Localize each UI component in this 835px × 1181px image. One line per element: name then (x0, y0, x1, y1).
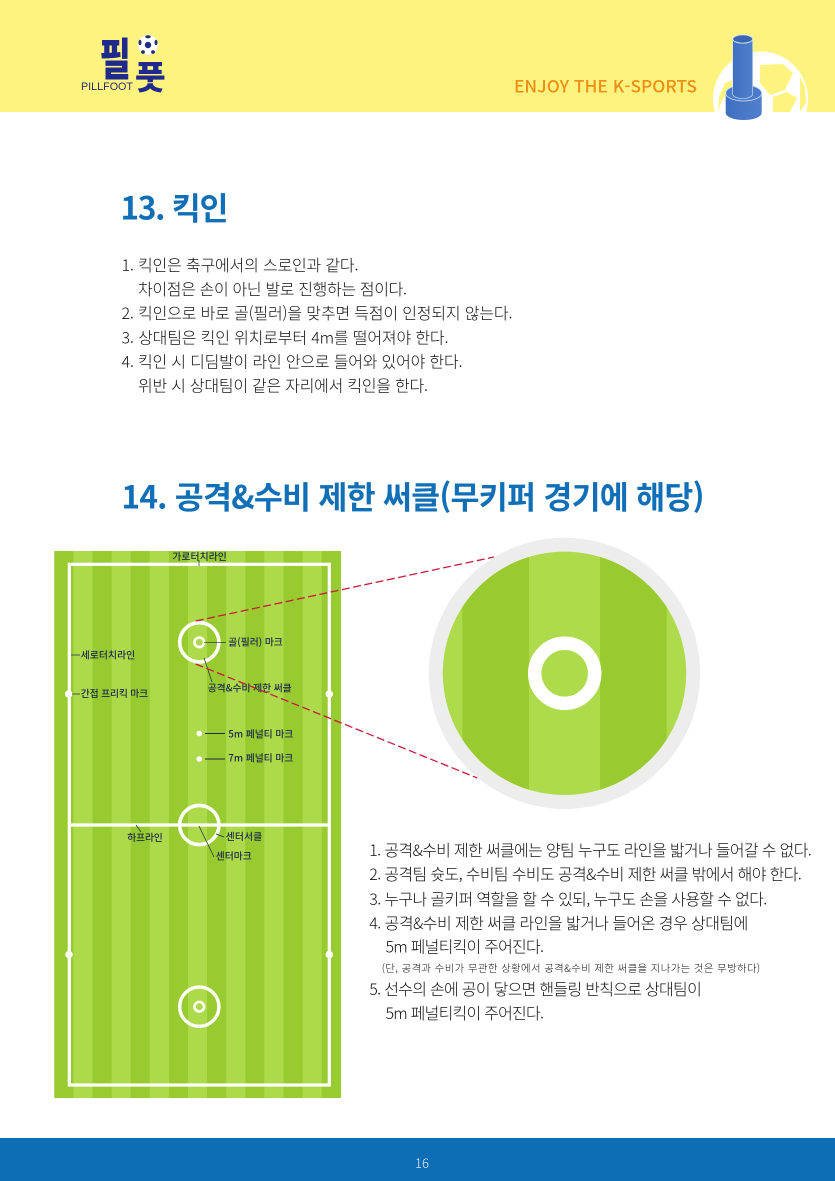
text block: section 13 rules: 2. 킥인으로 바로 골(필러)을 맞추면 득점이 인정되지 않는다. (122, 300, 512, 324)
text block: section 13 rules: 차이점은 손이 아닌 발로 진행하는 점이다. (138, 276, 407, 300)
text block: section 14 rules: (단, 공격과 수비가 무관한 상황에서 공격&수비 제한 써클을 지나가는 것은 무방하다) (382, 960, 760, 975)
header band (0, 0, 835, 112)
text block: section 14 rules: 4. 공격&수비 제한 써클 라인을 밟거나 들어온 경우 상대팀에 (369, 910, 748, 934)
icon: logo soccer ball (138, 35, 158, 55)
panel: futsal pitch diagram (54, 549, 341, 1098)
text block: section 13 rules: 3. 상대팀은 킥인 위치로부터 4m를 떨어져야 한다. (122, 324, 448, 348)
pitch lines (69, 564, 329, 1085)
pillar shaft (733, 39, 753, 98)
text block: section 14 rules: 5. 선수의 손에 공이 닿으면 핸들링 반칙으로 상대팀이 (369, 976, 702, 1000)
text block: section 14 rules: 5m 페널티킥이 주어진다. (386, 934, 544, 958)
icon: pillar (726, 35, 762, 120)
pitch labels: 간접 프리킥 마크 (81, 686, 148, 700)
logo: PILLFOOT (81, 25, 166, 99)
callout: dashed zoom lines (196, 557, 494, 778)
text block: section 13 rules (122, 252, 512, 397)
text block: section 13 rules: 위반 시 상대팀이 같은 자리에서 킥인을 한다. (138, 373, 428, 397)
pillar base (726, 93, 762, 120)
page number: 16 (415, 1153, 429, 1172)
footer band (0, 1138, 835, 1181)
pitch labels: 센터서클 (226, 829, 262, 843)
heading: section 14: 14. 공격&수비 제한 써클(무키퍼 경기에 해당) (122, 472, 704, 518)
pitch marks (65, 690, 333, 958)
text block: section 13 rules: 4. 킥인 시 디딤발이 라인 안으로 들어와 있어야 한다. (122, 348, 462, 372)
pitch labels: 공격&수비 제한 써클 (208, 681, 292, 695)
logo wordmark second syllable: 풋 (135, 52, 166, 99)
pitch labels (81, 549, 293, 862)
text block: section 14 rules: 3. 누구나 골키퍼 역할을 할 수 있되, 누구도 손을 사용할 수 없다. (369, 886, 767, 910)
pitch labels: 가로터치라인 (172, 549, 227, 563)
pitch labels: 5m 페널티 마크 (228, 726, 293, 740)
text block: section 13 rules: 1. 킥인은 축구에서의 스로인과 같다. (122, 252, 358, 276)
pitch labels: 골(필러) 마크 (228, 635, 283, 649)
leader lines (71, 560, 226, 857)
icon: soccer ball behind pillar (713, 52, 808, 112)
pitch labels: 센터마크 (216, 848, 252, 862)
pitch stripes (54, 551, 341, 1098)
logo wordmark: 필 (100, 25, 131, 88)
pitch labels: 세로터치라인 (81, 647, 135, 661)
pitch labels: 하프라인 (127, 830, 163, 844)
text block: section 14 rules: 5m 페널티킥이 주어진다. (386, 1000, 544, 1024)
text block: section 14 rules: 1. 공격&수비 제한 써클에는 양팀 누구도 라인을 밟거나 들어갈 수 없다. (369, 837, 812, 861)
text block: section 14 rules (369, 837, 812, 1024)
logo latin text: PILLFOOT (81, 81, 133, 93)
callout: magnified goal circle (429, 538, 700, 809)
heading: section 13: 13. 킥인 (120, 184, 228, 230)
pitch labels: 7m 페널티 마크 (228, 751, 293, 765)
text block: section 14 rules: 2. 공격팀 슛도, 수비팀 수비도 공격&수비 제한 써클 밖에서 해야 한다. (369, 861, 802, 885)
header tagline: ENJOY THE K-SPORTS (514, 72, 697, 98)
